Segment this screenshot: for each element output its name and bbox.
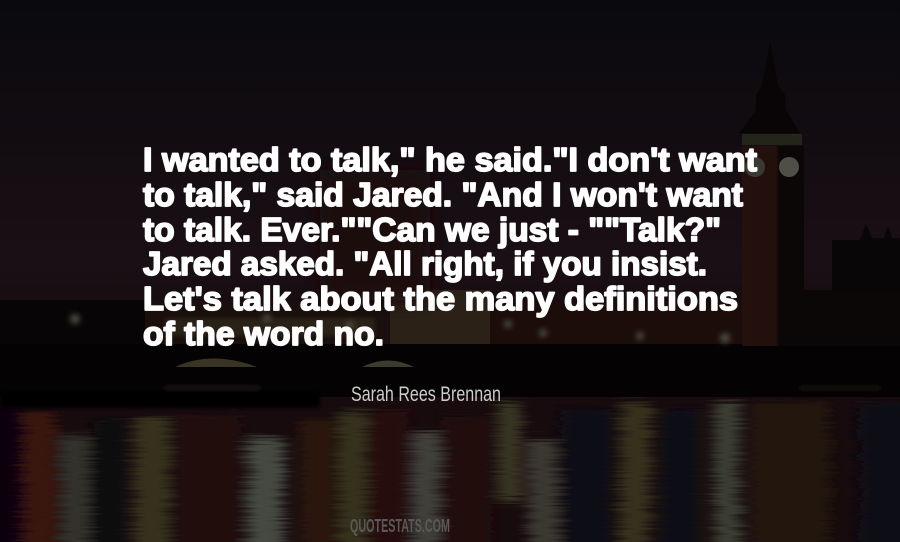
clock faces	[745, 157, 799, 177]
quote text: to talk," said Jared. "And I won't want	[143, 176, 743, 213]
quote text: Jared asked. "All right, if you insist.	[143, 245, 707, 282]
dark riverbank and bridge band	[0, 344, 900, 397]
quote text: I wanted to talk," he said."I don't want	[143, 141, 757, 178]
quote text	[143, 141, 757, 352]
Big Ben clock tower	[739, 42, 804, 346]
quote text: of the word no.	[143, 315, 384, 352]
bridge lights	[165, 358, 880, 390]
river water with light reflections	[0, 396, 900, 542]
author name: Sarah Rees Brennan	[351, 383, 501, 406]
quote text: to talk. Ever.""Can we just - ""Talk?"	[143, 211, 721, 248]
quote text: Let's talk about the many definitions	[143, 280, 738, 317]
watermark: QUOTESTATS.COM	[350, 516, 450, 536]
Houses of Parliament silhouette	[0, 170, 900, 346]
night sky background	[0, 0, 900, 400]
